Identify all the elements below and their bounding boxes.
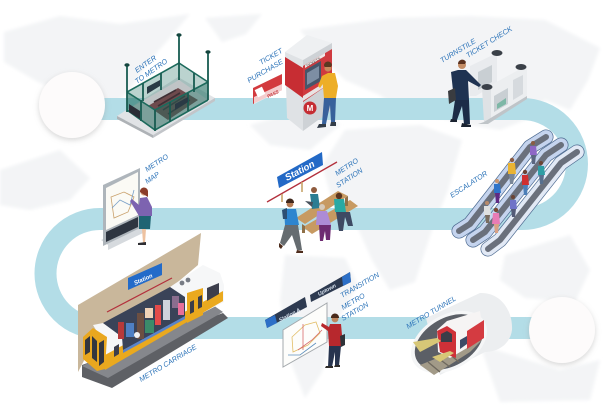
ticket machine: M — [307, 104, 314, 113]
seated people — [305, 187, 353, 241]
person: ticket buyer — [317, 61, 338, 128]
end circle — [529, 297, 595, 363]
label: to metro: TO METRO — [133, 56, 169, 86]
station sign: Station — [283, 159, 317, 184]
signs: uptown — [310, 272, 351, 302]
metro map board — [101, 168, 143, 250]
ticket machine — [285, 35, 332, 131]
ticket pass — [253, 74, 282, 104]
ticket machine: TICKETS — [305, 56, 322, 68]
label: metro map: METRO — [143, 152, 170, 174]
signs: station a: Station A — [278, 307, 302, 324]
label: metro tunnel: METRO TUNNEL — [404, 294, 458, 331]
label: metro carriage: METRO CARRIAGE — [137, 342, 198, 384]
benches — [296, 191, 358, 234]
label: station: STATION — [334, 165, 365, 190]
label: enter to metro: ENTER — [133, 53, 158, 75]
label: transition: TRANSITION — [338, 270, 381, 300]
route band — [46, 109, 577, 328]
metro tunnel — [400, 293, 512, 386]
signs: uptown: Uptown — [317, 283, 338, 298]
escalator — [459, 137, 577, 249]
label: station: STATION — [340, 299, 371, 323]
metro carriage: Station — [133, 273, 154, 287]
metro carriage — [78, 233, 228, 388]
map board — [283, 303, 327, 367]
person: businessman — [448, 60, 481, 127]
station sign — [267, 152, 337, 202]
label: turnstile: TURNSTILE — [438, 36, 477, 65]
signs: station a — [265, 297, 307, 328]
passengers — [118, 296, 184, 339]
label: escalator: ESCALATOR — [448, 169, 489, 200]
label: ticket check: TICKET CHECK — [464, 23, 515, 60]
label: purchase: PURCHASE — [246, 57, 285, 85]
start circle — [39, 72, 105, 138]
turnstile — [470, 50, 527, 124]
label: ticket: TICKET — [258, 46, 285, 67]
label: map: MAP — [143, 170, 161, 186]
escalator riders — [484, 141, 545, 233]
metro entrance — [117, 33, 215, 138]
ticket pass: PASS — [266, 89, 280, 99]
label: metro station: METRO — [333, 156, 360, 178]
person: man walking — [279, 198, 303, 253]
label: metro: METRO — [340, 291, 367, 312]
person: woman at map — [130, 187, 152, 245]
person: man reading map — [321, 313, 345, 368]
